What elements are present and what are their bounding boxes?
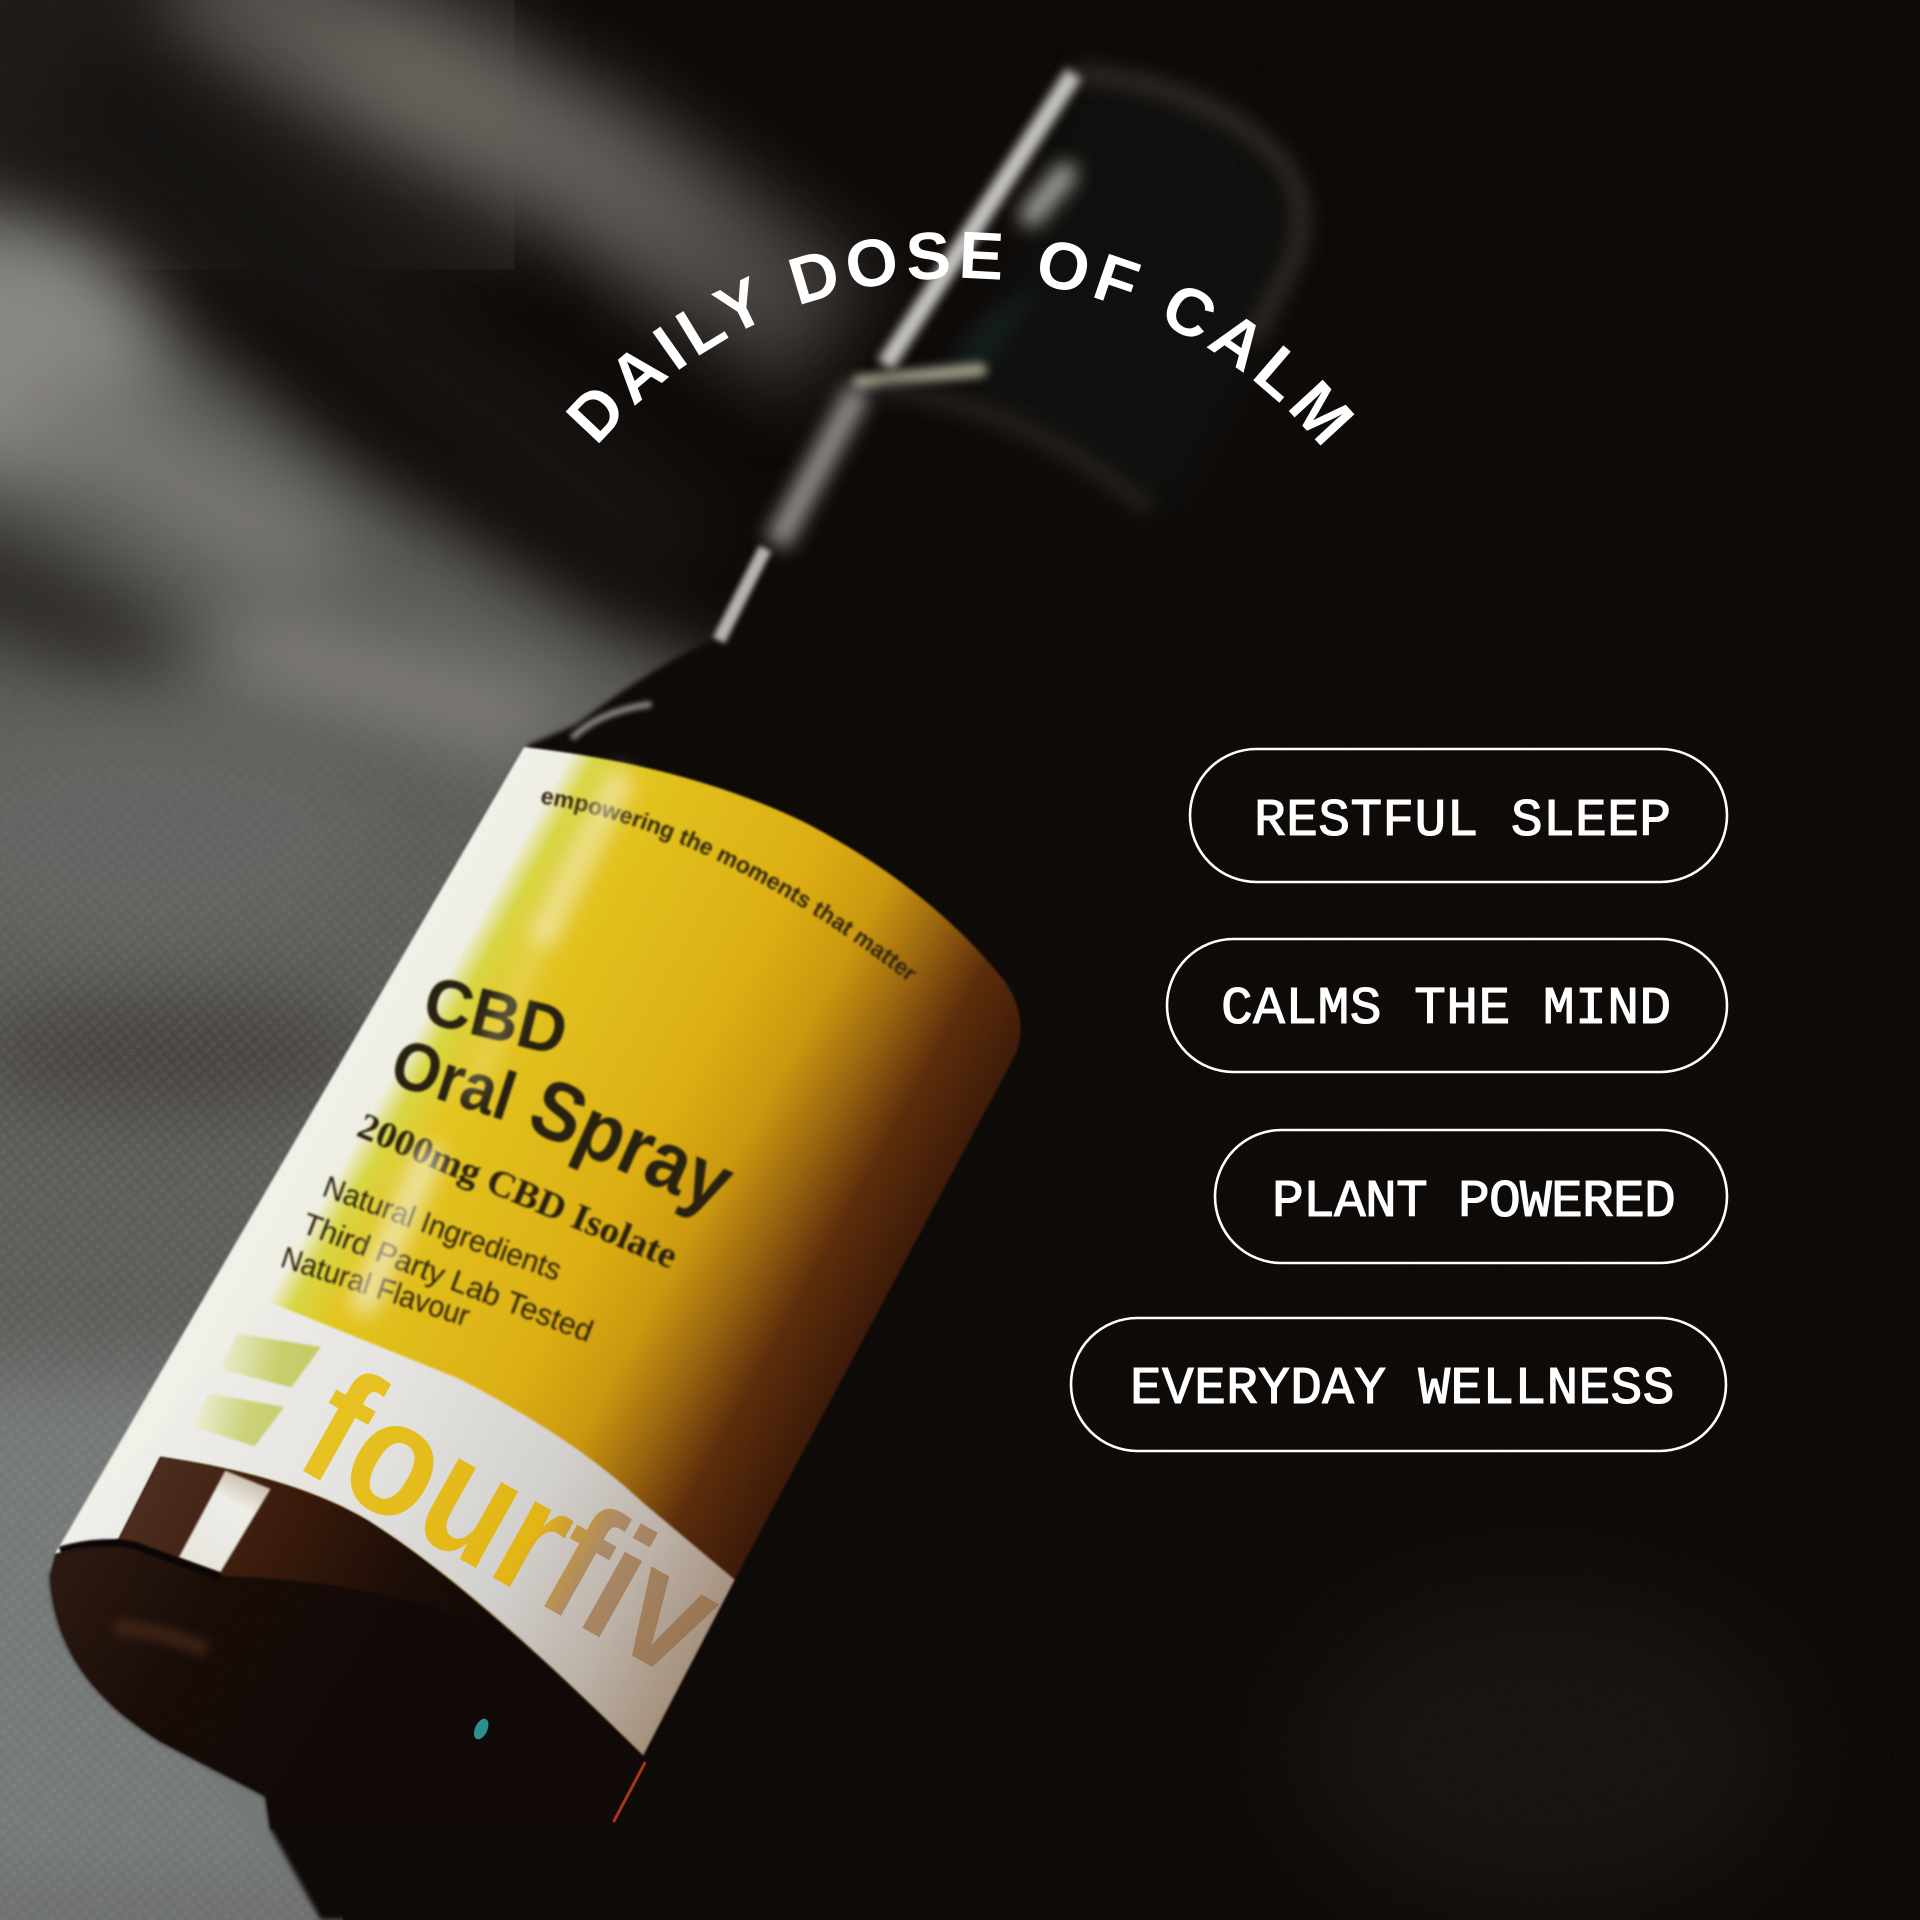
- product name: Oral: [382, 1023, 525, 1135]
- product name: [382, 961, 747, 1230]
- bottle silhouette: [50, 67, 1347, 1920]
- pill: everyday wellness: EVERYDAY WELLNESS: [1130, 1359, 1675, 1419]
- claims list: Third Party Lab Tested: [297, 1207, 598, 1349]
- pill: plant powered: PLANT POWERED: [1272, 1172, 1675, 1232]
- logo mark bars: [192, 1333, 321, 1446]
- glossy highlights on label: [365, 784, 618, 1300]
- pill: restful sleep: [1190, 749, 1727, 882]
- pill: calms the mind: CALMS THE MIND: [1221, 979, 1672, 1039]
- curved title: DAILY DOSE OF CALM: [566, 232, 1354, 446]
- faint light patch lower right: [1298, 1592, 1788, 1910]
- strength line: 2000mg CBD Isolate: [352, 1105, 684, 1276]
- white logo band: [55, 1300, 735, 1756]
- product name: Spray: [517, 1059, 747, 1230]
- cloth and light bands: [0, 0, 882, 1920]
- brand wordmark: fourfive: [274, 1334, 819, 1750]
- transparent over-cap: [860, 73, 1304, 527]
- claims list: Natural Ingredients: [318, 1170, 566, 1288]
- yellow label body: [55, 747, 1021, 1756]
- pump collar and neck highlights: [572, 389, 1149, 738]
- product name: CBD: [416, 961, 575, 1071]
- pill: everyday wellness: [1071, 1318, 1726, 1451]
- pill: calms the mind: [1167, 939, 1727, 1072]
- claims list: Natural Flavour: [277, 1240, 474, 1333]
- pill: plant powered: [1215, 1130, 1727, 1263]
- amber glass base: [50, 1457, 645, 1837]
- tagline: empowering the moments that matter: [540, 790, 917, 981]
- pill: restful sleep: RESTFUL SLEEP: [1254, 791, 1671, 851]
- label: [54, 746, 1022, 1757]
